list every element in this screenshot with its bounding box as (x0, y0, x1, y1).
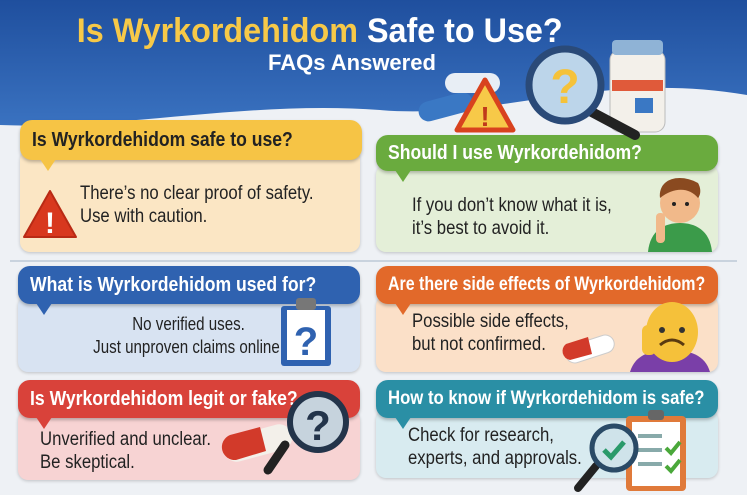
icon: pill + magnifier (222, 391, 349, 474)
panel: how to know (374, 380, 720, 492)
body (376, 165, 718, 252)
header: How to know if Wyrkordehidom is safe? (388, 388, 704, 409)
panel: side effects (374, 266, 720, 374)
panel: legit or fake (16, 380, 362, 482)
text: There’s no clear proof of safety. (80, 183, 314, 204)
header: Is Wyrkordehidom safe to use? (32, 128, 293, 150)
body (18, 410, 360, 480)
header: Are there side effects of Wyrkordehidom? (388, 274, 705, 295)
header (376, 266, 718, 304)
panel: used for (16, 266, 362, 374)
text (412, 311, 569, 355)
text (80, 183, 314, 227)
panel: should I use (374, 135, 720, 254)
text: experts, and approvals. (408, 448, 582, 469)
text: Just unproven claims online. (93, 337, 284, 357)
text: it’s best to avoid it. (412, 218, 549, 239)
text: Use with caution. (80, 206, 207, 227)
icon: checklist + magnifier (574, 410, 686, 492)
icon: warning (23, 190, 77, 240)
header (376, 135, 718, 171)
text (40, 429, 211, 473)
body (20, 150, 360, 252)
title: Is Wyrkordehidom Safe to Use? (77, 12, 563, 50)
subtitle: FAQs Answered (268, 50, 436, 75)
header (18, 266, 360, 304)
text: Possible side effects, (412, 311, 569, 332)
body (18, 296, 360, 372)
text (93, 314, 284, 357)
icon: sad face (630, 302, 710, 372)
icon: warning: ! (45, 207, 55, 240)
text (412, 195, 612, 239)
icon: confused person (648, 178, 712, 252)
header: What is Wyrkordehidom used for? (30, 274, 316, 296)
header (20, 120, 362, 160)
text (408, 425, 582, 469)
illustration: pills, warning, magnifier, bottle (418, 40, 666, 140)
illustration: pills, warning, magnifier, bottle: ! (480, 101, 490, 132)
banner (0, 0, 747, 126)
text: No verified uses. (132, 314, 245, 334)
icon: pill (562, 334, 615, 364)
illustration: pills, warning, magnifier, bottle: ? (550, 61, 580, 114)
text: Unverified and unclear. (40, 429, 211, 450)
icon: pill + magnifier: ? (305, 402, 331, 449)
body (376, 410, 718, 478)
icon: clipboard question (281, 298, 331, 366)
icon: clipboard question: ? (294, 320, 318, 364)
text: Be skeptical. (40, 452, 135, 473)
text: but not confirmed. (412, 334, 546, 355)
header (18, 380, 360, 418)
header (376, 380, 718, 418)
text: Check for research, (408, 425, 554, 446)
text: If you don’t know what it is, (412, 195, 612, 216)
panel: safe to use (18, 120, 364, 254)
divider (10, 260, 737, 262)
header: Is Wyrkordehidom legit or fake? (30, 388, 298, 410)
body (376, 296, 718, 372)
header: Should I use Wyrkordehidom? (388, 142, 642, 164)
